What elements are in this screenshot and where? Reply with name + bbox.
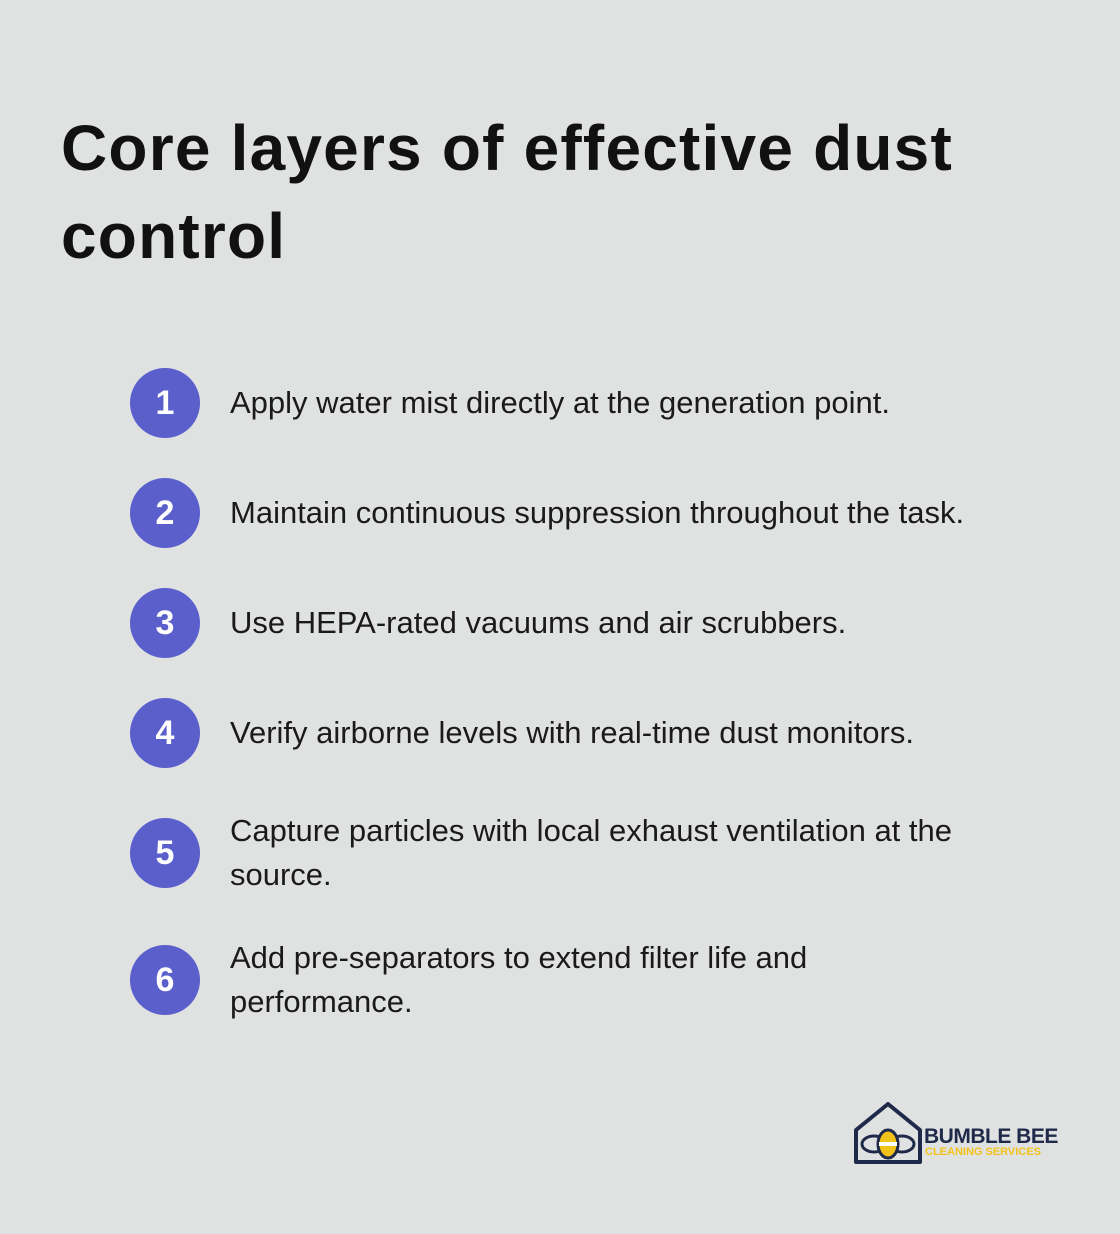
item 4 bbox=[130, 698, 914, 768]
icon: bee house bbox=[854, 1102, 922, 1164]
item 5: source. bbox=[230, 857, 332, 892]
title: control bbox=[61, 200, 286, 272]
logo bbox=[854, 1102, 1058, 1164]
item 1: 1 bbox=[156, 384, 174, 422]
item 5 bbox=[130, 813, 952, 892]
item 3 bbox=[130, 588, 846, 658]
title: Core layers of effective dust bbox=[61, 112, 953, 184]
item 1 bbox=[130, 368, 890, 438]
item 4: 4 bbox=[156, 714, 174, 752]
item 4: Verify airborne levels with real-time dust monitors. bbox=[230, 715, 914, 750]
item 6: performance. bbox=[230, 984, 413, 1019]
item 2: 2 bbox=[156, 494, 174, 532]
item 6 bbox=[130, 940, 807, 1019]
title bbox=[61, 112, 953, 272]
item 6: Add pre-separators to extend filter life and bbox=[230, 940, 807, 975]
item 6: 6 bbox=[156, 961, 174, 999]
item 2 bbox=[130, 478, 964, 548]
item 3: Use HEPA-rated vacuums and air scrubbers. bbox=[230, 605, 846, 640]
item 5: Capture particles with local exhaust ventilation at the bbox=[230, 813, 952, 848]
item 3: 3 bbox=[156, 604, 174, 642]
logo: CLEANING SERVICES bbox=[925, 1146, 1041, 1158]
item 5: 5 bbox=[156, 834, 174, 872]
item 2: Maintain continuous suppression throughout the task. bbox=[230, 495, 964, 530]
item 1: Apply water mist directly at the generation point. bbox=[230, 385, 890, 420]
logo text: BUMBLE BEE bbox=[924, 1125, 1058, 1148]
